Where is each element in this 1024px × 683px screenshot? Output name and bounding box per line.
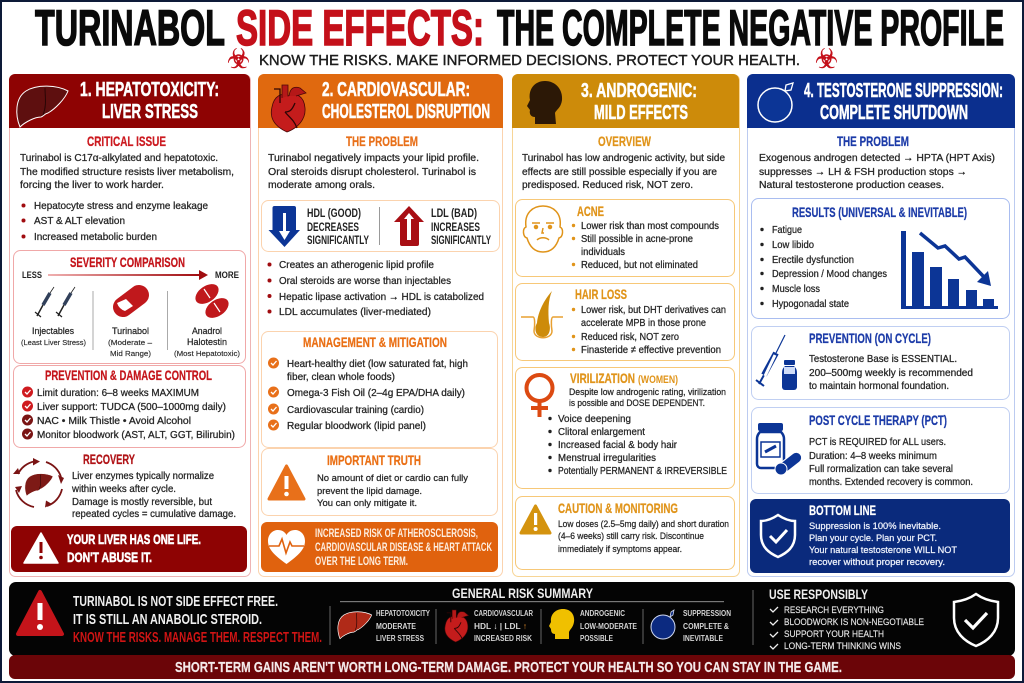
the problem text: suppresses → LH & FSH production stops → — [759, 166, 967, 178]
risk item: suppression: SUPPRESSION — [683, 608, 731, 618]
warning text: IT IS STILL AN ANABOLIC STEROID. — [73, 611, 262, 628]
panel: androgenic — [512, 74, 740, 576]
panel heading: LIVER STRESS — [102, 101, 198, 123]
lipid bullets: Creates an atherogenic lipid profile — [279, 259, 434, 271]
icon: ldl up arrow — [394, 206, 424, 246]
severity dividers and labels: Halotestin — [187, 337, 227, 348]
results box — [752, 198, 1010, 318]
footer banner: SHORT-TERM GAINS AREN'T WORTH LONG-TERM DAMAGE. PROTECT YOUR HEALTH SO YOU CAN STAY IN THE GAME. — [175, 659, 842, 676]
prevention checks — [22, 386, 235, 441]
icon: pills — [192, 280, 232, 322]
title: SIDE EFFECTS: — [236, 0, 484, 56]
pct text: Duration: 4–8 weeks minimum — [809, 450, 937, 462]
icon: biohazard left: ☣ — [227, 44, 250, 75]
hair loss text: HAIR LOSS — [575, 286, 627, 302]
recovery text: RECOVERY — [83, 451, 135, 467]
risk item: androgenic: ANDROGENIC — [580, 608, 625, 618]
panel heading — [581, 80, 697, 124]
icon: warning triangle — [269, 466, 304, 499]
hdl ldl box — [262, 200, 500, 252]
hair loss text: accelerate MPB in those prone — [581, 317, 706, 329]
caution text: immediately if symptoms appear. — [558, 544, 682, 555]
virilization text: Menstrual irregularities — [558, 452, 656, 464]
warning text: KNOW THE RISKS. MANAGE THEM. RESPECT THEM. — [73, 629, 322, 646]
pct text: Full rormalization can take several — [809, 463, 953, 475]
overview text: Turinabol has low androgenic activity, but side — [522, 152, 725, 164]
important truth text: No amount of diet or cardio can fully — [317, 473, 468, 484]
icon: face — [523, 206, 563, 252]
bottom line text: BOTTOM LINE — [809, 502, 876, 518]
risk item: androgenic: LOW-MODERATE — [580, 621, 637, 631]
critical issue text — [20, 152, 234, 191]
acne text: Reduced, but not eliminated — [581, 259, 698, 271]
callout: increased risk banner — [261, 522, 498, 572]
results list: Erectile dysfunction — [772, 254, 854, 266]
risk item: cardiovascular — [445, 608, 534, 643]
acne text: Lower risk than most compounds — [581, 220, 719, 232]
panel heading — [804, 80, 1003, 124]
hair loss box — [516, 284, 734, 360]
risk item: suppression — [651, 608, 731, 643]
overview text: predisposed. Reduced risk, NOT zero. — [522, 179, 693, 191]
risk item: hepatotoxicity — [338, 608, 430, 643]
risk item: androgenic — [549, 608, 637, 643]
results list: Low libido — [772, 239, 814, 251]
panel heading: MILD EFFECTS — [594, 102, 688, 124]
hdl label: DECREASES — [307, 220, 359, 234]
panel: general risk summary bar — [9, 582, 1015, 656]
risk item: hepatotoxicity: HEPATOTOXICITY — [376, 608, 430, 618]
management heading: MANAGEMENT & MITIGATION — [303, 334, 447, 350]
lipid bullets: Oral steroids are worse than injectables — [279, 275, 451, 287]
panel header — [512, 74, 739, 128]
warning text — [73, 593, 322, 646]
panel header — [258, 74, 503, 128]
panel: testosterone suppression — [747, 74, 1015, 576]
virilization text: Voice deepening — [558, 413, 631, 425]
critical issue bullets: Hepatocyte stress and enzyme leakage — [34, 200, 208, 212]
important truth text — [317, 473, 468, 509]
critical issue text: forcing the liver to work harder. — [20, 179, 164, 191]
title: TURINABOL — [35, 0, 225, 56]
critical issue text: The modified structure resists liver metabolism, — [20, 166, 234, 178]
management checks — [268, 358, 468, 432]
virilization text: is possible and DOSE DEPENDENT. — [569, 398, 705, 409]
panel: cardiovascular — [258, 74, 503, 576]
use responsibly list: SUPPORT YOUR HEALTH — [784, 629, 884, 639]
icon: head silhouette — [527, 81, 562, 124]
prevention and damage control box — [14, 366, 246, 448]
prevention checks: Monitor bloodwork (AST, ALT, GGT, Bilirubin) — [37, 429, 235, 441]
severity dividers and labels: Turinabol — [112, 326, 149, 337]
hair loss text: Finasteride ≠ effective prevention — [581, 344, 721, 356]
risk item: hepatotoxicity: LIVER STRESS — [376, 633, 424, 643]
panel heading: 1. HEPATOTOXICITY: — [80, 79, 219, 101]
icon: shield check — [761, 515, 795, 557]
icon: capsule — [109, 281, 153, 321]
prevention on cycle box — [752, 326, 1010, 400]
overview heading: OVERVIEW — [598, 133, 652, 149]
risk item: androgenic: POSSIBLE — [580, 633, 613, 643]
prevention checks: NAC • Milk Thistle • Avoid Alcohol — [37, 415, 191, 427]
severity dividers and labels: (Most Hepatotoxic) — [174, 349, 240, 358]
results list — [760, 224, 887, 310]
bottom line text: Suppression is 100% inevitable. — [809, 521, 941, 532]
hair loss text — [572, 286, 726, 356]
prevention checks: Liver support: TUDCA (500–1000mg daily) — [37, 401, 226, 413]
panel heading — [322, 79, 490, 123]
recovery text: Liver enzymes typically normalize — [72, 470, 214, 482]
risk item: cardiovascular: INCREASED RISK — [474, 633, 533, 643]
subtitle: KNOW THE RISKS. MAKE INFORMED DECISIONS. PROTECT YOUR HEALTH. — [259, 52, 800, 69]
severity dividers and labels — [21, 291, 240, 358]
acne box — [516, 200, 734, 276]
recovery text — [71, 451, 236, 520]
hdl label: SIGNIFICANTLY — [307, 233, 369, 247]
icon: recovery cycle — [13, 458, 64, 508]
the problem text — [759, 152, 995, 191]
results list: Muscle loss — [772, 283, 820, 295]
panel heading: 3. ANDROGENIC: — [581, 80, 697, 102]
severity scale arrow — [22, 270, 239, 280]
important truth box — [262, 448, 498, 516]
management checks: fiber, clean whole foods) — [287, 371, 395, 383]
virilization text: Despite low androgenic rating, virilization — [569, 387, 726, 398]
callout: liver warning — [11, 526, 247, 572]
virilization text: Increased facial & body hair — [558, 439, 677, 451]
severity scale arrow: MORE — [215, 270, 239, 280]
severity dividers and labels: Anadrol — [192, 326, 222, 337]
critical issue bullets: Increased metabolic burden — [34, 231, 157, 243]
severity dividers and labels: (Least Liver Stress) — [21, 338, 86, 347]
acne text: Still possible in acne-prone — [581, 233, 693, 245]
overview text: effects are still possible especially if you are — [522, 166, 717, 178]
callout: bottom line — [750, 499, 1010, 573]
management checks: Heart-healthy diet (low saturated fat, high — [287, 358, 468, 370]
use responsibly list: BLOODWORK IS NON-NEGOTIABLE — [784, 617, 924, 627]
use responsibly list: RESEARCH EVERYTHING — [784, 605, 884, 615]
virilization text: Potentially PERMANENT & IRREVERSIBLE — [558, 465, 727, 477]
icon: red warning triangle — [18, 592, 62, 634]
title — [35, 0, 1004, 56]
callout: increased risk banner: CARDIOVASCULAR DISEASE & HEART ATTACK — [315, 542, 492, 554]
icon: shield check — [954, 594, 998, 646]
icon: syringes — [35, 287, 75, 317]
severity comparison box — [14, 250, 246, 364]
bottom line text: Plan your cycle. Plan your PCT. — [809, 533, 937, 544]
use responsibly list: USE RESPONSIBLY — [769, 586, 868, 602]
bottom line text: Your natural testosterone WILL NOT — [809, 545, 957, 556]
acne text — [572, 203, 719, 271]
callout: increased risk banner: INCREASED RISK OF ATHEROSCLEROSIS, — [315, 528, 478, 540]
hair loss text: Reduced risk, NOT zero — [581, 331, 679, 343]
the problem heading: THE PROBLEM — [837, 133, 909, 149]
virilization text: Clitoral enlargement — [558, 426, 645, 438]
recovery text: repeated cycles = cumulative damage. — [72, 508, 236, 520]
recovery text: within weeks after cycle. — [71, 483, 176, 495]
bottom line text: recover without proper recovery. — [809, 557, 945, 568]
risk item: hepatotoxicity: MODERATE — [376, 621, 416, 631]
ldl label: INCREASES — [431, 220, 480, 234]
prevention text — [809, 330, 973, 392]
prevention checks: Limit duration: 6–8 weeks MAXIMUM — [37, 387, 199, 399]
footer banner — [9, 655, 1015, 679]
the problem text: Oral steroids disrupt cholesterol. Turinabol is — [268, 166, 476, 178]
critical issue bullets — [22, 200, 208, 243]
severity dividers and labels: Mid Range) — [110, 349, 151, 358]
severity heading: SEVERITY COMPARISON — [70, 254, 185, 270]
important truth heading: IMPORTANT TRUTH — [327, 452, 421, 468]
pct text — [809, 412, 973, 488]
callout: increased risk banner: OVER THE LONG TERM. — [315, 556, 408, 568]
risk item: suppression: COMPLETE & — [683, 621, 729, 631]
acne text: individuals — [581, 246, 625, 258]
callout: liver warning: DON'T ABUSE IT. — [67, 549, 152, 565]
the problem text: Exogenous androgen detected → HPTA (HPT Axis) — [759, 152, 995, 164]
caution text — [558, 500, 729, 555]
icon: syringe and vial — [756, 335, 797, 390]
ldl label — [431, 206, 491, 247]
icon: hair follicle — [521, 291, 563, 338]
severity dividers and labels: Injectables — [32, 326, 74, 337]
acne text: ACNE — [577, 203, 604, 219]
icon: testicle — [758, 83, 793, 122]
management checks: Regular bloodwork (lipid panel) — [287, 420, 426, 432]
panel heading: CHOLESTEROL DISRUPTION — [322, 101, 490, 123]
use responsibly list: LONG-TERM THINKING WINS — [784, 641, 901, 651]
panel heading: 2. CARDIOVASCULAR: — [322, 79, 470, 101]
hdl label — [307, 206, 369, 247]
results list: Hypogonadal state — [772, 298, 849, 310]
important truth text: You can only mitigate it. — [317, 498, 417, 509]
virilization text: (WOMEN) — [638, 374, 678, 386]
icon: pill bottle — [757, 423, 804, 475]
recovery text: Damage is mostly reversible, but — [72, 496, 212, 508]
overview text — [522, 152, 725, 191]
risk item: suppression: INEVITABLE — [683, 633, 723, 643]
prevention text: 200–500mg weekly is recommended — [809, 367, 973, 379]
use responsibly list — [769, 586, 924, 651]
icon: caution triangle — [521, 506, 550, 533]
management checks: Cardiovascular training (cardio) — [287, 404, 424, 416]
icon: biohazard right: ☣ — [815, 44, 838, 75]
panel heading — [80, 79, 219, 123]
virilization text — [548, 370, 727, 477]
icon: venus symbol — [526, 375, 552, 417]
icon: hdl down arrow — [268, 206, 300, 247]
ldl label: SIGNIFICANTLY — [431, 233, 491, 247]
severity dividers and labels: (Moderate – — [108, 338, 153, 347]
the problem heading: THE PROBLEM — [346, 133, 418, 149]
panel header — [747, 74, 1015, 128]
panel header — [9, 74, 250, 128]
icon: liver — [17, 86, 68, 127]
important truth text: prevent the lipid damage. — [317, 486, 422, 497]
icon: heart — [271, 85, 306, 132]
lipid bullets: LDL accumulates (liver-mediated) — [279, 306, 431, 318]
prevention text: to maintain hormonal foundation. — [809, 380, 949, 392]
callout: liver warning: YOUR LIVER HAS ONE LIFE. — [67, 531, 201, 547]
risk summary heading: GENERAL RISK SUMMARY — [452, 585, 594, 601]
results list: Fatigue — [772, 224, 802, 236]
caution box — [516, 496, 734, 570]
the problem text: Turinabol negatively impacts your lipid profile. — [268, 152, 479, 164]
prevention text: PREVENTION (ON CYCLE) — [809, 330, 931, 346]
pct text: PCT is REQUIRED for ALL users. — [809, 436, 946, 448]
declining bar chart — [901, 231, 998, 309]
pct text: months. Extended recovery is common. — [809, 476, 973, 488]
lipid bullets: Hepatic lipase activation → HDL is catabolized — [279, 291, 484, 303]
ldl label: LDL (BAD) — [431, 206, 477, 220]
critical issue heading: CRITICAL ISSUE — [87, 133, 166, 149]
bottom line text — [809, 502, 957, 568]
results list: Depression / Mood changes — [772, 268, 887, 280]
hair loss text: Lower risk, but DHT derivatives can — [581, 304, 726, 316]
virilization box — [516, 368, 734, 488]
caution text: (4–6 weeks) still carry risk. Discontinue — [558, 531, 704, 542]
post cycle therapy box — [752, 408, 1010, 494]
the problem text: moderate among orals. — [268, 179, 375, 191]
prevention text: Testosterone Base is ESSENTIAL. — [809, 353, 957, 365]
management checks: Omega-3 Fish Oil (2–4g EPA/DHA daily) — [287, 387, 465, 399]
caution text: Low doses (2.5–5mg daily) and short duration — [558, 519, 729, 530]
critical issue bullets: AST & ALT elevation — [34, 215, 125, 227]
lipid bullets — [268, 259, 484, 318]
critical issue text: Turinabol is C17α-alkylated and hepatotoxic. — [20, 152, 218, 164]
virilization text: VIRILIZATION — [570, 370, 635, 386]
severity scale arrow: LESS — [22, 270, 42, 280]
panel: hepatotoxicity — [9, 74, 250, 576]
pct text: POST CYCLE THERAPY (PCT) — [809, 412, 947, 428]
management box — [262, 332, 498, 448]
caution text: CAUTION & MONITORING — [558, 500, 678, 516]
risk item: cardiovascular: HDL ↓ | LDL ↑ — [474, 621, 527, 631]
warning text: TURINABOL IS NOT SIDE EFFECT FREE. — [73, 593, 278, 610]
risk item: cardiovascular: CARDIOVASCULAR — [474, 608, 534, 618]
hdl label: HDL (GOOD) — [307, 206, 361, 220]
prevention heading: PREVENTION & DAMAGE CONTROL — [45, 367, 212, 383]
the problem text: Natural testosterone production ceases. — [759, 179, 944, 191]
the problem text — [268, 152, 479, 191]
